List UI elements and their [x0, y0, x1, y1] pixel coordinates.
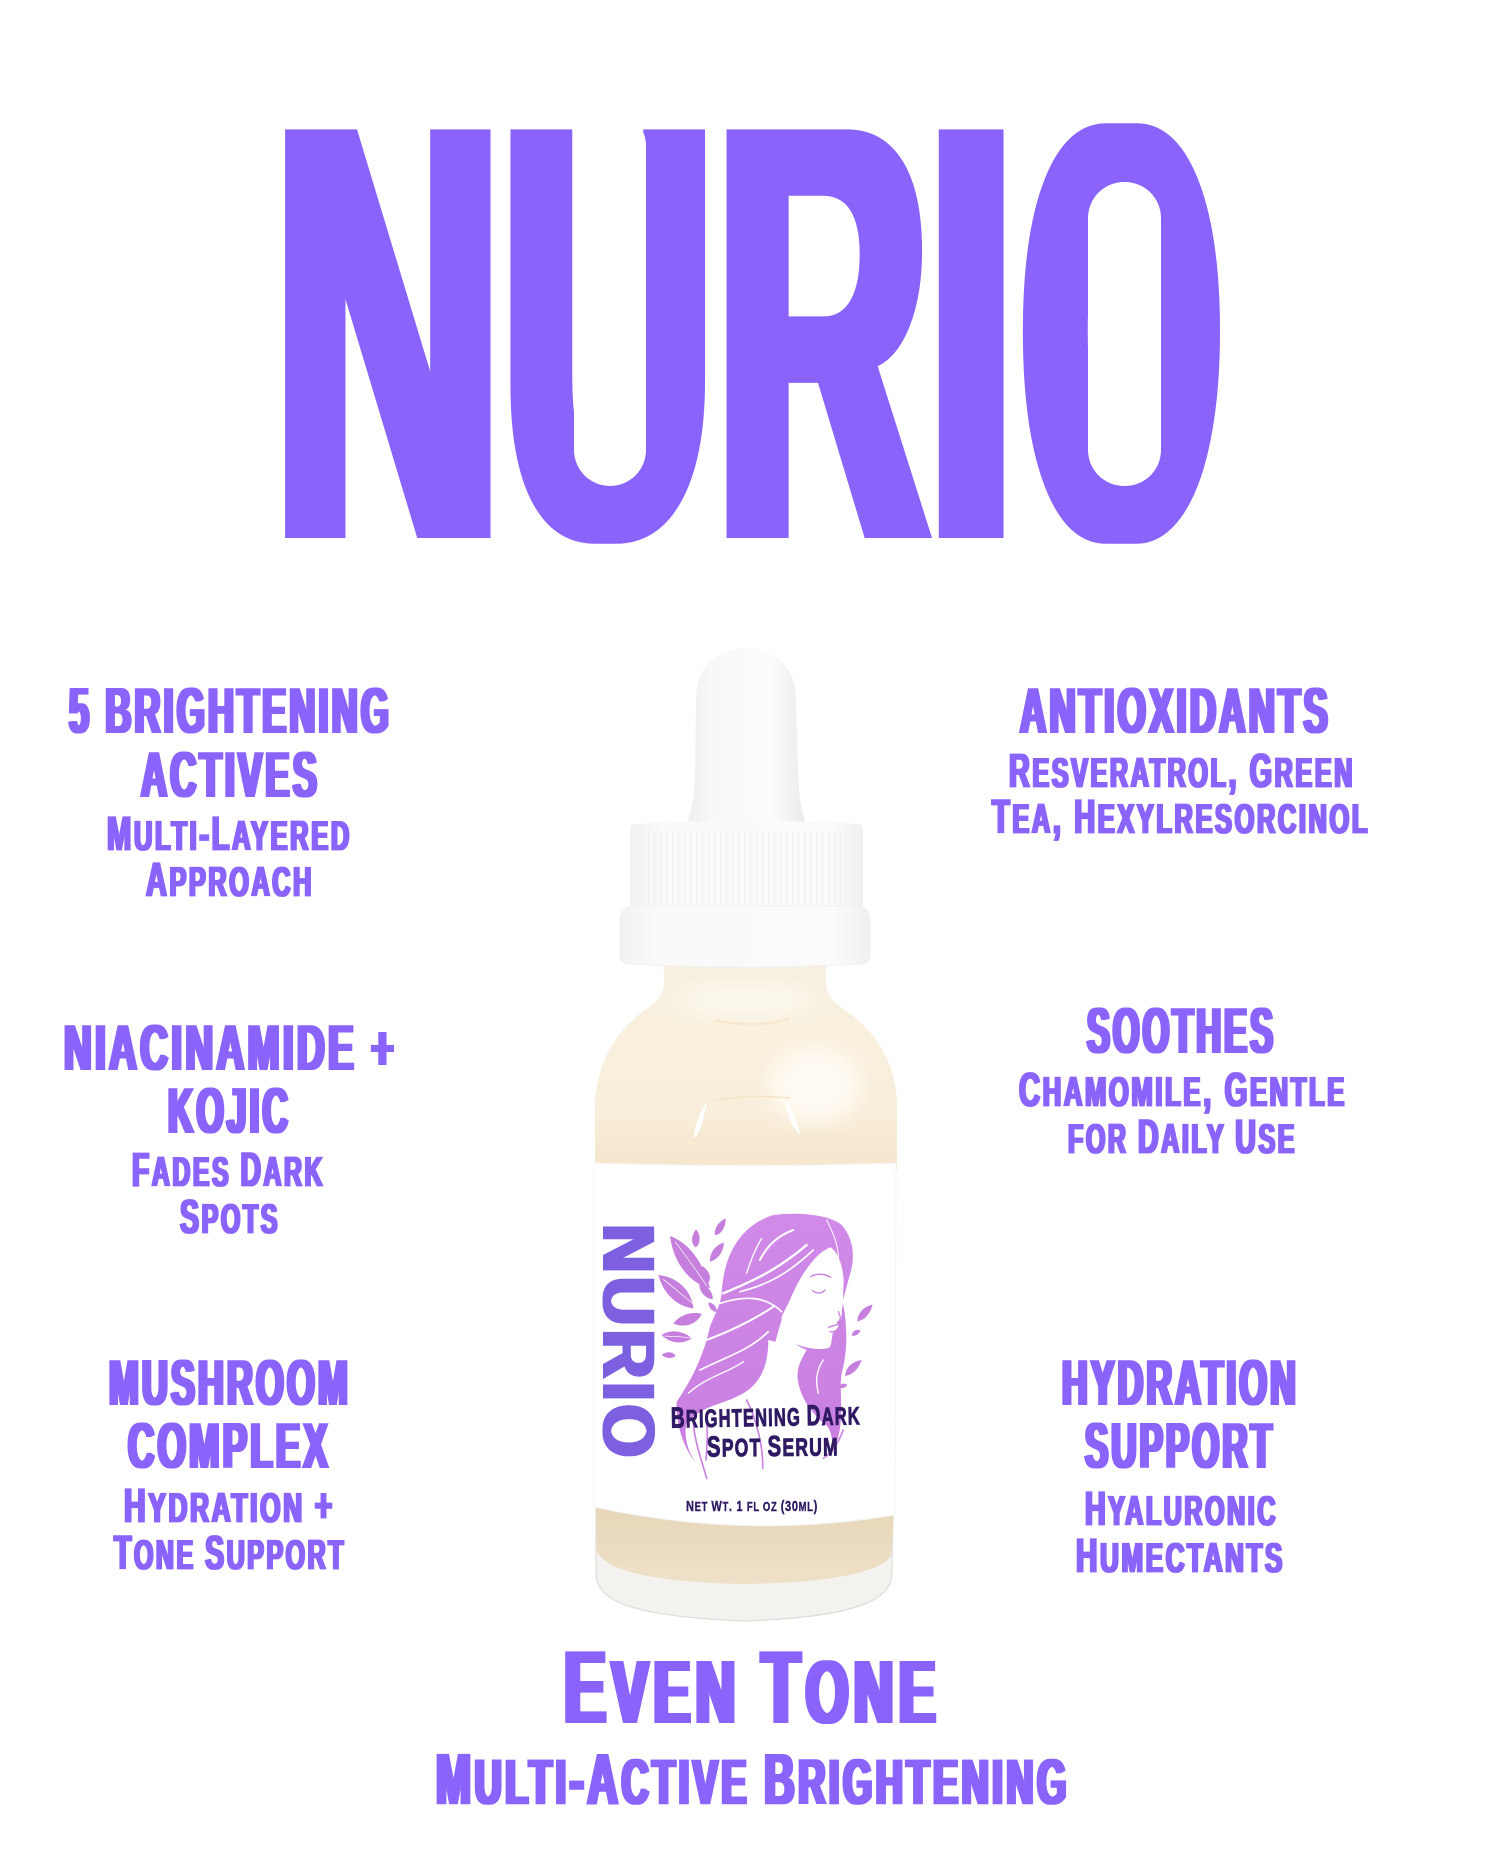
callout: soothes: [1019, 994, 1347, 1164]
title: NURIO: R: [717, 1, 928, 665]
hair wisps: [693, 1400, 843, 1478]
glass highlights: [675, 982, 861, 1138]
dropper bulb: [687, 648, 806, 824]
title: NURIO: N: [274, 0, 502, 664]
lower serum: [596, 1500, 895, 1584]
label product name: [671, 1399, 861, 1464]
title: NURIO: U: [503, 2, 713, 665]
face and neck: [782, 1247, 844, 1349]
callout: soothes: FOR DAILY USE: [1068, 1111, 1297, 1164]
callout: mushroom complex: MUSHROOM: [109, 1346, 351, 1419]
label product name: BRIGHTENING DARK: [671, 1399, 861, 1435]
callout: niacinamide + kojic: KOJIC: [168, 1074, 291, 1147]
label product name: SPOT SERUM: [707, 1430, 839, 1464]
callout: mushroom complex: HYDRATION +: [124, 1480, 335, 1533]
hair strands: [688, 1220, 839, 1393]
callout: mushroom complex: COMPLEX: [128, 1409, 331, 1482]
callout: hydration support: HYALURONIC: [1085, 1483, 1278, 1536]
headline: even tone: EVEN TONE: [564, 1630, 941, 1746]
label illustration: woman with leaves: [658, 1214, 873, 1478]
label brand: NURIO: NURIO: [587, 1224, 670, 1461]
callout: mushroom complex: TONE SUPPORT: [114, 1527, 346, 1580]
callout: niacinamide + kojic: [64, 1011, 397, 1244]
callout: 5 brightening actives: ACTIVES: [141, 738, 320, 811]
subheadline: multi-active brightening: MULTI-ACTIVE BRIGHTENING: [436, 1740, 1070, 1820]
label net weight: NET WT. 1 FL OZ (30ML): [686, 1498, 818, 1515]
callout: soothes: CHAMOMILE, GENTLE: [1019, 1064, 1347, 1117]
callout: hydration support: HUMECTANTS: [1076, 1530, 1285, 1583]
facial features: [811, 1274, 843, 1347]
callout: 5 brightening actives: MULTI-LAYERED: [107, 808, 352, 861]
callout: hydration support: [1062, 1346, 1299, 1583]
callout: hydration support: SUPPORT: [1085, 1409, 1275, 1482]
neck gap: [760, 1317, 807, 1403]
callout: hydration support: HYDRATION: [1062, 1346, 1299, 1419]
callout: antioxidants: [992, 674, 1370, 844]
title: NURIO: O: [1028, 2, 1215, 665]
callout: antioxidants: RESVERATROL, GREEN: [1009, 745, 1355, 798]
callout: 5 brightening actives: [69, 674, 392, 907]
bottle glass base: [596, 1500, 893, 1621]
hair: [676, 1214, 853, 1463]
title: NURIO: [274, 0, 1215, 665]
label: [594, 1163, 896, 1526]
product bottle: [587, 648, 897, 1621]
leaf veins: [663, 1242, 710, 1338]
collar ring: [620, 906, 870, 967]
callout: mushroom complex: [109, 1346, 351, 1580]
callout: niacinamide + kojic: NIACINAMIDE +: [64, 1011, 397, 1084]
callout: niacinamide + kojic: FADES DARK: [132, 1144, 325, 1197]
callout: soothes: SOOTHES: [1087, 994, 1276, 1067]
callout: niacinamide + kojic: SPOTS: [180, 1191, 280, 1244]
callout: 5 brightening actives: APPROACH: [146, 854, 314, 907]
upper bottle with serum: [595, 965, 897, 1170]
callout: 5 brightening actives: 5 BRIGHTENING: [69, 674, 392, 747]
leaves: [658, 1218, 873, 1388]
ribbed collar: [630, 821, 863, 908]
title: NURIO: I: [928, 2, 1014, 665]
